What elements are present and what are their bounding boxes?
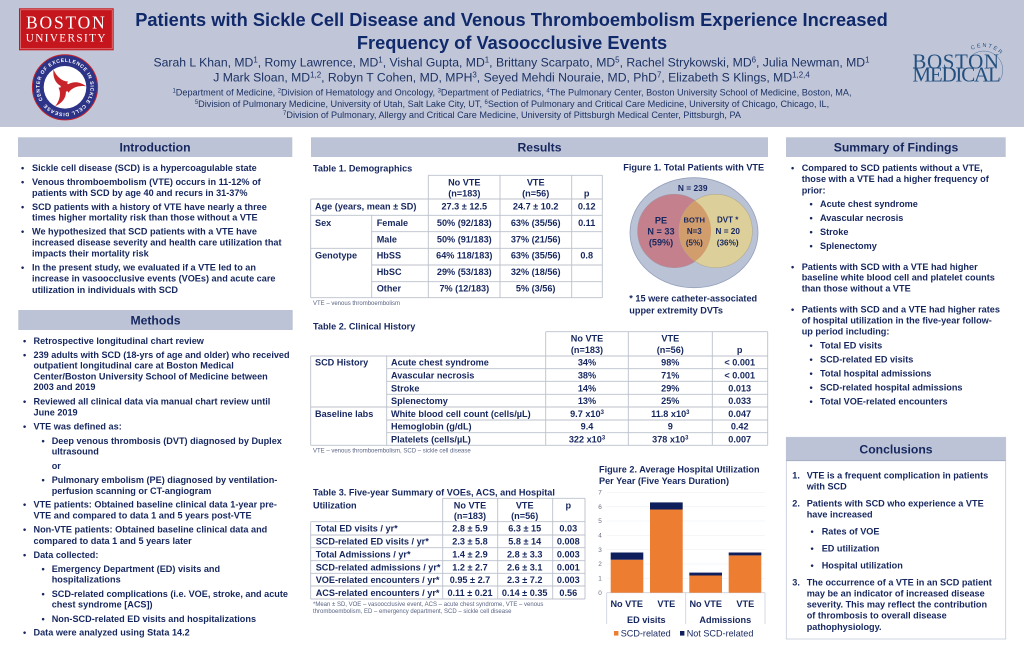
table 2: clinical history: 14% — [578, 383, 596, 393]
table 1: demographics: HbSS — [377, 251, 401, 261]
table 1: demographics: Female — [377, 218, 408, 228]
text block: conclusions list: with SCD — [806, 481, 847, 491]
table 3: five-year summary: 6.3 ± 15 — [508, 524, 541, 534]
table 3: five-year summary: Utilization — [313, 500, 357, 510]
heading: methods — [18, 310, 293, 330]
text block: summary bullets: Acute chest syndrome — [820, 199, 918, 209]
text block: methods bullets: Retrospective longitudinal chart review — [34, 336, 205, 346]
text block: methods bullets: • — [42, 589, 45, 599]
authors — [154, 55, 870, 84]
text block: summary bullets: than those without a VTE — [802, 284, 911, 294]
table 2: clinical history: (n=56) — [657, 345, 684, 355]
text block: summary bullets: • — [810, 227, 813, 237]
header banner — [0, 0, 1024, 127]
table 1: demographics — [311, 164, 602, 307]
table 3: five-year summary: VOE-related encounters / yr* — [316, 575, 440, 585]
title: Frequency of Vasoocclusive Events — [357, 32, 667, 53]
figure 2: stacked bar chart: VTE — [736, 599, 754, 609]
text block: summary bullets: Splenectomy — [820, 241, 878, 251]
figure 1: venn diagram: BOTH — [684, 216, 705, 224]
text block: summary bullets: up period including: — [802, 326, 889, 336]
text block: summary bullets: SCD-related ED visits — [820, 354, 913, 364]
text block: methods bullets: SCD-related complications (i.e. VOE, stroke, and acute — [52, 589, 288, 599]
table 1: demographics: 7% (12/183) — [439, 284, 489, 294]
table 3: five-year summary: 2.3 ± 7.2 — [507, 575, 542, 585]
table 2: clinical history: 0.013 — [728, 383, 751, 393]
text block: methods bullets: Data collected: — [34, 550, 98, 560]
text block: methods bullets: ultrasound — [52, 447, 99, 457]
table 2: clinical history: 38% — [578, 370, 596, 380]
text block: methods bullets: • — [42, 564, 45, 574]
text block: methods bullets: Deep venous thrombosis (DVT) diagnosed by Duplex — [52, 436, 283, 446]
text block: introduction bullets: • — [21, 202, 24, 212]
table 2: clinical history: 25% — [661, 396, 679, 406]
table 2: clinical history: 0.007 — [728, 434, 751, 444]
figure 2: stacked bar chart: ED visits — [627, 615, 666, 625]
authors: J Mark Sloan, MD1,2, Robyn T Cohen, MD, MPH3, Seyed Mehdi Nouraie, MD, PhD7, Elizabeth S Klings, MD1,2,4 — [213, 70, 810, 84]
text block: methods bullets — [23, 336, 290, 638]
text block: introduction bullets: • — [21, 227, 24, 237]
text block: conclusions list: of thrombosis to overall disease — [807, 611, 947, 621]
text block: methods bullets: • — [23, 422, 26, 432]
table 3: five-year summary: 0.003 — [557, 549, 580, 559]
heading: methods: Methods — [130, 313, 181, 327]
table 2: clinical history: No VTE — [571, 334, 603, 344]
text block: introduction bullets: increase in vasoocclusive events (VOEs) and acute care — [32, 274, 275, 284]
bars: admissions, VTE — [729, 552, 761, 593]
table 3: five-year summary: Total ED visits / yr* — [316, 524, 398, 534]
table 2: clinical history: Table 2. Clinical History — [313, 321, 416, 331]
panel: introduction — [18, 137, 292, 295]
text block: introduction bullets: • — [21, 163, 24, 173]
text block: conclusions list: Patients with SCD who experience a VTE — [807, 498, 984, 508]
table 3: five-year summary: 0.003 — [557, 575, 580, 585]
text block: conclusions list: 1. — [792, 470, 800, 480]
text block: methods bullets: Pulmonary embolism (PE) diagnosed by ventilation- — [52, 475, 277, 485]
text block: methods bullets: VTE was defined as: — [34, 422, 122, 432]
table 3: five-year summary: 2.3 ± 5.8 — [452, 537, 488, 547]
table 3: five-year summary: 0.11 ± 0.21 — [447, 588, 493, 598]
figure 1: venn diagram: N = 20 — [716, 227, 740, 236]
heading: conclusions — [786, 437, 1006, 461]
table 3: five-year summary: (n=183) — [454, 511, 486, 521]
text block: methods bullets: • — [42, 614, 45, 624]
table 3: five-year summary: *Mean ± SD, VOE – vasoocclusive event, ACS – acute chest syndrome, VTE – venous — [313, 602, 543, 608]
table 3: five-year summary: thromboembolism, ED – emergency department, SCD – sickle cell disease — [313, 609, 512, 615]
figure 2: stacked bar chart: 1 — [598, 576, 602, 582]
text block: summary bullets: • — [810, 383, 813, 393]
table 3: five-year summary: Total Admissions / yr* — [316, 549, 411, 559]
table 3: five-year summary — [311, 487, 585, 615]
table 3: five-year summary: 1.2 ± 2.7 — [452, 562, 488, 572]
text block: introduction bullets: times higher mortality risk than those without a VTE — [32, 212, 258, 222]
figure 1: venn diagram: PE — [655, 215, 667, 225]
table 2: clinical history: 13% — [578, 396, 596, 406]
text block: summary bullets: • — [810, 340, 813, 350]
text block: methods bullets: • — [23, 397, 26, 407]
logo: Boston Medical Center: MEDICAL — [912, 63, 1000, 87]
text block: methods bullets: Center/Boston University School of Medicine between — [34, 371, 268, 381]
table 3: five-year summary: SCD-related admissions / yr* — [316, 562, 441, 572]
text block: methods bullets: compared to data 1 and 5 years later — [34, 536, 192, 546]
text block: methods bullets: Data were analyzed using Stata 14.2 — [34, 628, 190, 638]
table 2: clinical history: White blood cell count (cells/µL) — [391, 409, 531, 419]
table 1: demographics: 0.12 — [578, 201, 596, 211]
text block: summary bullets: Avascular necrosis — [820, 213, 903, 223]
table 1: demographics: 50% (92/183) — [437, 218, 492, 228]
text block: methods bullets: Reviewed all clinical data via manual chart review until — [34, 397, 270, 407]
table 2: clinical history: Baseline labs — [315, 409, 373, 419]
heading: results — [311, 137, 768, 157]
table 1: demographics: (n=183) — [448, 189, 480, 199]
legend: SCD-related — [621, 629, 671, 639]
legend: Not SCD-related — [687, 629, 753, 639]
text block: methods bullets: • — [23, 525, 26, 535]
bars: ED visits, VTE — [650, 502, 683, 593]
text block: conclusions list: pathophysiology. — [807, 622, 882, 632]
text block: methods bullets: • — [23, 336, 26, 346]
affiliations: 7Division of Pulmonary, Allergy and Critical Care Medicine, University of Pittsburgh Medical Center, Pittsburgh, PA — [283, 110, 742, 120]
table 1: demographics: Table 1. Demographics — [313, 164, 412, 174]
text block: conclusions list — [792, 470, 992, 632]
text block: introduction bullets: SCD patients with a history of VTE have nearly a three — [32, 202, 267, 212]
text block: summary bullets: • — [810, 369, 813, 379]
text block: methods bullets: • — [23, 350, 26, 360]
text block: methods bullets: 239 adults with SCD (18-yrs of age and older) who received — [34, 350, 290, 360]
figure 2: stacked bar chart: 0 — [598, 590, 602, 597]
table 3: five-year summary: 2.8 ± 3.3 — [507, 549, 542, 559]
text block: summary bullets: • — [791, 163, 794, 173]
panel: results — [311, 137, 768, 639]
table 1: demographics: 5% (3/56) — [516, 284, 555, 294]
text block: summary bullets: Total ED visits — [820, 340, 882, 350]
text block: summary bullets — [791, 163, 1000, 406]
affiliations: 5Division of Pulmonary Medicine, University of Utah, Salt Lake City, UT, 6Section of Pulmonary and Critical Care Medicine, University of Chicago, Chicago, IL, — [195, 99, 829, 109]
title: Patients with Sickle Cell Disease and Venous Thromboembolism Experience Increased — [135, 9, 888, 30]
text block: summary bullets: • — [791, 304, 794, 314]
table 2: clinical history: 11.8 x103 — [651, 409, 690, 419]
text block: summary bullets: • — [791, 262, 794, 272]
heading: introduction: Introduction — [119, 140, 191, 154]
text block: summary bullets: Stroke — [820, 227, 848, 237]
table 2: clinical history: 71% — [661, 370, 679, 380]
figure 1: venn diagram — [623, 163, 764, 315]
text block: methods bullets: or — [52, 461, 61, 471]
table 2: clinical history: < 0.001 — [724, 370, 755, 380]
text block: methods bullets: • — [23, 550, 26, 560]
figure 1: venn diagram: N=3 — [687, 227, 702, 236]
text block: methods bullets: 2003 and 2019 — [34, 382, 95, 392]
text block: introduction bullets: Sickle cell disease (SCD) is a hypercoagulable state — [32, 163, 257, 173]
text block: summary bullets: • — [810, 199, 813, 209]
table 1: demographics: No VTE — [448, 178, 481, 188]
table 1: demographics: 0.8 — [580, 251, 593, 261]
panel: conclusions — [786, 437, 1006, 639]
table 2: clinical history: 98% — [661, 358, 679, 368]
table 3: five-year summary: 0.95 ± 2.7 — [450, 575, 490, 585]
text block: summary bullets: • — [810, 354, 813, 364]
text block: methods bullets: Emergency Department (ED) visits and — [52, 564, 220, 574]
figure 1: venn diagram: (36%) — [717, 238, 739, 247]
text block: introduction bullets: impacts their mortality risk — [32, 248, 150, 258]
table 1: demographics: 0.11 — [578, 218, 595, 228]
table 2: clinical history: VTE — [661, 334, 679, 344]
text block: introduction bullets: Venous thromboembolism (VTE) occurs in 11-12% of — [32, 177, 262, 187]
table 1: demographics: VTE – venous thromboembolism — [313, 301, 400, 307]
figure 2: stacked bar chart: 4 — [598, 532, 602, 539]
table 2: clinical history: VTE – venous thromboembolism, SCD – sickle cell disease — [313, 448, 471, 454]
table 1: demographics: Other — [377, 284, 401, 294]
table 1: demographics: 32% (18/56) — [511, 267, 561, 277]
table 2: clinical history: Stroke — [391, 383, 419, 393]
text block: methods bullets: perfusion scanning or CT-angiogram — [52, 486, 211, 496]
text block: summary bullets: those with a VTE had a higher frequency of — [802, 174, 990, 184]
logo: Boston University: UNIVERSITY — [26, 32, 107, 44]
text block: methods bullets: VTE and compared to data 1 and 5 years post-VTE — [34, 511, 252, 521]
text block: conclusions list: Rates of VOE — [822, 526, 880, 536]
table 2: clinical history: < 0.001 — [724, 358, 755, 368]
table 2: clinical history: Avascular necrosis — [391, 370, 474, 380]
text block: methods bullets: • — [23, 500, 26, 510]
figure 2: stacked bar chart: Figure 2. Average Hospital Utilization — [599, 465, 760, 475]
text block: summary bullets: • — [810, 213, 813, 223]
table 3: five-year summary: 0.001 — [557, 562, 580, 572]
legend — [614, 629, 753, 639]
text block: summary bullets: Total VOE-related encounters — [820, 396, 948, 406]
text block: conclusions list: ED utilization — [822, 544, 880, 554]
table 2: clinical history: 29% — [661, 383, 679, 393]
text block: conclusions list: • — [810, 544, 814, 554]
panel: summary of findings — [786, 137, 1006, 406]
figure 1: venn diagram: (5%) — [686, 238, 703, 247]
table 3: five-year summary: 0.56 — [559, 588, 577, 598]
table 2: clinical history: 9 — [668, 422, 673, 432]
table 2: clinical history: Hemoglobin (g/dL) — [391, 422, 472, 432]
table 2: clinical history: 34% — [578, 358, 596, 368]
table 1: demographics: Male — [377, 234, 397, 244]
table 2: clinical history: 322 x103 — [569, 434, 606, 444]
table 3: five-year summary: Table 3. Five-year Summary of VOEs, ACS, and Hospital — [313, 487, 555, 497]
table 3: five-year summary: 0.008 — [557, 537, 580, 547]
table 1: demographics: 64% 118/183) — [436, 251, 492, 261]
logo: Boston Medical Center: BOSTON — [912, 49, 1000, 73]
title — [135, 9, 888, 53]
text block: methods bullets: • — [42, 436, 45, 446]
panel: methods — [18, 310, 293, 638]
table 2: clinical history: p — [737, 345, 743, 355]
table 3: five-year summary: 5.8 ± 14 — [508, 537, 542, 547]
text block: conclusions list: 3. — [792, 578, 800, 588]
text block: conclusions list: severity. This may reflect the contribution — [807, 600, 987, 610]
figure 2: stacked bar chart: 5 — [598, 518, 602, 525]
figure 1: venn diagram: (59%) — [649, 238, 673, 248]
text block: conclusions list: The occurrence of a VTE in an SCD patient — [807, 578, 992, 588]
table 2: clinical history: Splenectomy — [391, 396, 449, 406]
figure 2: stacked bar chart: No VTE — [689, 599, 722, 609]
heading: summary of findings: Summary of Findings — [834, 140, 959, 154]
text block: introduction bullets: utilization in individuals with SCD — [32, 285, 178, 295]
table 1: demographics: (n=56) — [522, 189, 549, 199]
figure 2: stacked bar chart — [598, 465, 765, 639]
table 2: clinical history: 378 x103 — [652, 434, 689, 444]
table 2: clinical history: Platelets (cells/µL) — [391, 434, 471, 444]
text block: summary bullets: baseline white blood cell and platelet counts — [802, 273, 995, 283]
table 3: five-year summary: VTE — [516, 500, 534, 510]
heading: results: Results — [517, 140, 562, 154]
table 2: clinical history: 0.047 — [728, 409, 751, 419]
text block: methods bullets: • — [42, 475, 45, 485]
text block: summary bullets: Compared to SCD patients without a VTE, — [802, 163, 983, 173]
table 2: clinical history: 9.7 x103 — [570, 409, 605, 419]
text block: methods bullets: • — [23, 628, 26, 638]
table 1: demographics: 27.3 ± 12.5 — [441, 201, 487, 211]
table 3: five-year summary: No VTE — [454, 500, 486, 510]
table 1: demographics: 63% (35/56) — [511, 251, 561, 261]
authors: Sarah L Khan, MD1, Romy Lawrence, MD1, Vishal Gupta, MD1, Brittany Scarpato, MD5, Rachel Strykowski, MD6, Julia Newman, MD1 — [154, 55, 870, 69]
figure 2: stacked bar chart: 7 — [598, 489, 602, 496]
logo: Center of Excellence seal: CENTER OF EXCELLENCE IN SICKLE CELL DISEASE — [36, 58, 94, 116]
text block: introduction bullets — [21, 163, 282, 295]
text block: summary bullets: Total hospital admissions — [820, 369, 931, 379]
heading: conclusions: Conclusions — [859, 443, 933, 457]
logo: Boston University — [19, 8, 114, 50]
table 2: clinical history: 0.033 — [728, 396, 751, 406]
text block: conclusions list: Hospital utilization — [822, 561, 903, 571]
table 1: demographics: HbSC — [377, 267, 402, 277]
table 2: clinical history: SCD History — [315, 358, 369, 368]
text block: conclusions list: may be an indicator of increased disease — [807, 589, 985, 599]
figure 1: venn diagram: upper extremity DVTs — [629, 305, 723, 315]
logo: Boston University: BOSTON — [26, 13, 107, 33]
table 2: clinical history: (n=183) — [571, 345, 603, 355]
table 1: demographics: 37% (21/56) — [511, 234, 561, 244]
text block: introduction bullets: patients with SCD by age 40 and recurs in 31-37% — [32, 188, 248, 198]
text block: introduction bullets: In the present study, we evaluated if a VTE led to an — [32, 263, 256, 273]
table 3: five-year summary: 2.6 ± 3.1 — [507, 562, 542, 572]
text block: introduction bullets: increased disease severity and health care utilization that — [32, 237, 282, 247]
table 1: demographics: p — [584, 189, 590, 199]
text block: summary bullets: • — [810, 241, 813, 251]
text block: conclusions list: VTE is a frequent complication in patients — [807, 470, 988, 480]
figure 1: venn diagram: * 15 were catheter-associated — [629, 294, 757, 304]
table 2: clinical history: 0.42 — [731, 422, 749, 432]
table 1: demographics: 24.7 ± 10.2 — [513, 201, 559, 211]
figure 2: stacked bar chart: Per Year (Five Years Duration) — [599, 476, 729, 486]
text block: summary bullets: Patients with SCD and a VTE had higher rates — [802, 304, 1000, 314]
table 1: demographics: Sex — [315, 218, 332, 228]
table 1: demographics: 29% (53/183) — [437, 267, 492, 277]
affiliations — [172, 88, 852, 120]
text block: summary bullets: of hospital utilization in the five-year follow- — [802, 315, 992, 325]
figure 2: stacked bar chart: VTE — [657, 599, 675, 609]
table 1: demographics: Age (years, mean ± SD) — [315, 201, 416, 211]
text block: methods bullets: Non-VTE patients: Obtained baseline clinical data and — [34, 525, 267, 535]
logo: Boston Medical Center — [912, 43, 1004, 87]
table 3: five-year summary: ACS-related encounters / yr* — [316, 588, 440, 598]
affiliations: 1Department of Medicine, 2Division of Hematology and Oncology, 3Department of Pediatrics, 4The Pulmonary Center, Boston University School of Medicine, Boston, MA, — [172, 88, 852, 98]
bars: admissions, no VTE — [689, 573, 722, 593]
text block: summary bullets: Patients with SCD with a VTE had higher — [802, 262, 978, 272]
figure 2: stacked bar chart: 3 — [598, 547, 602, 554]
figure 2: stacked bar chart: 2 — [598, 561, 602, 568]
text block: conclusions list: • — [810, 561, 814, 571]
table 2: clinical history: Acute chest syndrome — [391, 358, 489, 368]
text block: conclusions list: 2. — [792, 498, 800, 508]
figure 2: stacked bar chart: No VTE — [610, 599, 643, 609]
table 3: five-year summary: 2.8 ± 5.9 — [452, 524, 488, 534]
heading: introduction — [18, 137, 292, 157]
figure 2: stacked bar chart: 6 — [598, 504, 602, 511]
figure 1: venn diagram: DVT * — [717, 216, 739, 224]
table 1: demographics: Genotype — [315, 251, 357, 261]
table 2: clinical history — [311, 321, 768, 454]
table 3: five-year summary: 0.03 — [559, 524, 577, 534]
table 3: five-year summary: 0.14 ± 0.35 — [502, 588, 548, 598]
text block: methods bullets: Non-SCD-related ED visits and hospitalizations — [52, 614, 256, 624]
heading: summary of findings — [786, 137, 1006, 157]
text block: methods bullets: outpatient longitudinal care at Boston Medical — [34, 361, 234, 371]
figure 2: stacked bar chart: Admissions — [699, 615, 751, 625]
table 3: five-year summary: 1.4 ± 2.9 — [452, 549, 488, 559]
table 1: demographics: VTE — [527, 178, 545, 188]
table 2: clinical history: 9.4 — [581, 422, 594, 432]
text block: conclusions list: have increased — [807, 509, 873, 519]
figure 1: venn diagram: N = 33 — [647, 226, 675, 236]
text block: methods bullets: VTE patients: Obtained baseline clinical data 1-year pre- — [34, 500, 277, 510]
text block: methods bullets: hospitalizations — [52, 575, 121, 585]
text block: introduction bullets: • — [21, 177, 24, 187]
figure 1: venn diagram: Figure 1. Total Patients with VTE — [623, 163, 764, 173]
table 3: five-year summary: SCD-related ED visits / yr* — [316, 537, 429, 547]
table 1: demographics: 63% (35/56) — [511, 218, 561, 228]
figure 1: venn diagram: N = 239 — [678, 183, 708, 193]
table 3: five-year summary: p — [566, 500, 572, 510]
logo: Boston Medical Center: CENTER — [971, 43, 1002, 54]
text block: introduction bullets: We hypothesized that SCD patients with a VTE have — [32, 227, 257, 237]
text block: methods bullets: chest syndrome [ACS]) — [52, 600, 153, 610]
table 1: demographics: 50% (91/183) — [437, 234, 492, 244]
text block: summary bullets: prior: — [802, 185, 826, 195]
bars: ED visits, no VTE — [611, 552, 643, 593]
table 3: five-year summary: (n=56) — [511, 511, 538, 521]
text block: summary bullets: SCD-related hospital admissions — [820, 383, 962, 393]
text block: summary bullets: • — [810, 396, 813, 406]
text block: conclusions list: • — [810, 526, 814, 536]
text block: methods bullets: June 2019 — [34, 408, 78, 418]
text block: introduction bullets: • — [21, 263, 24, 273]
